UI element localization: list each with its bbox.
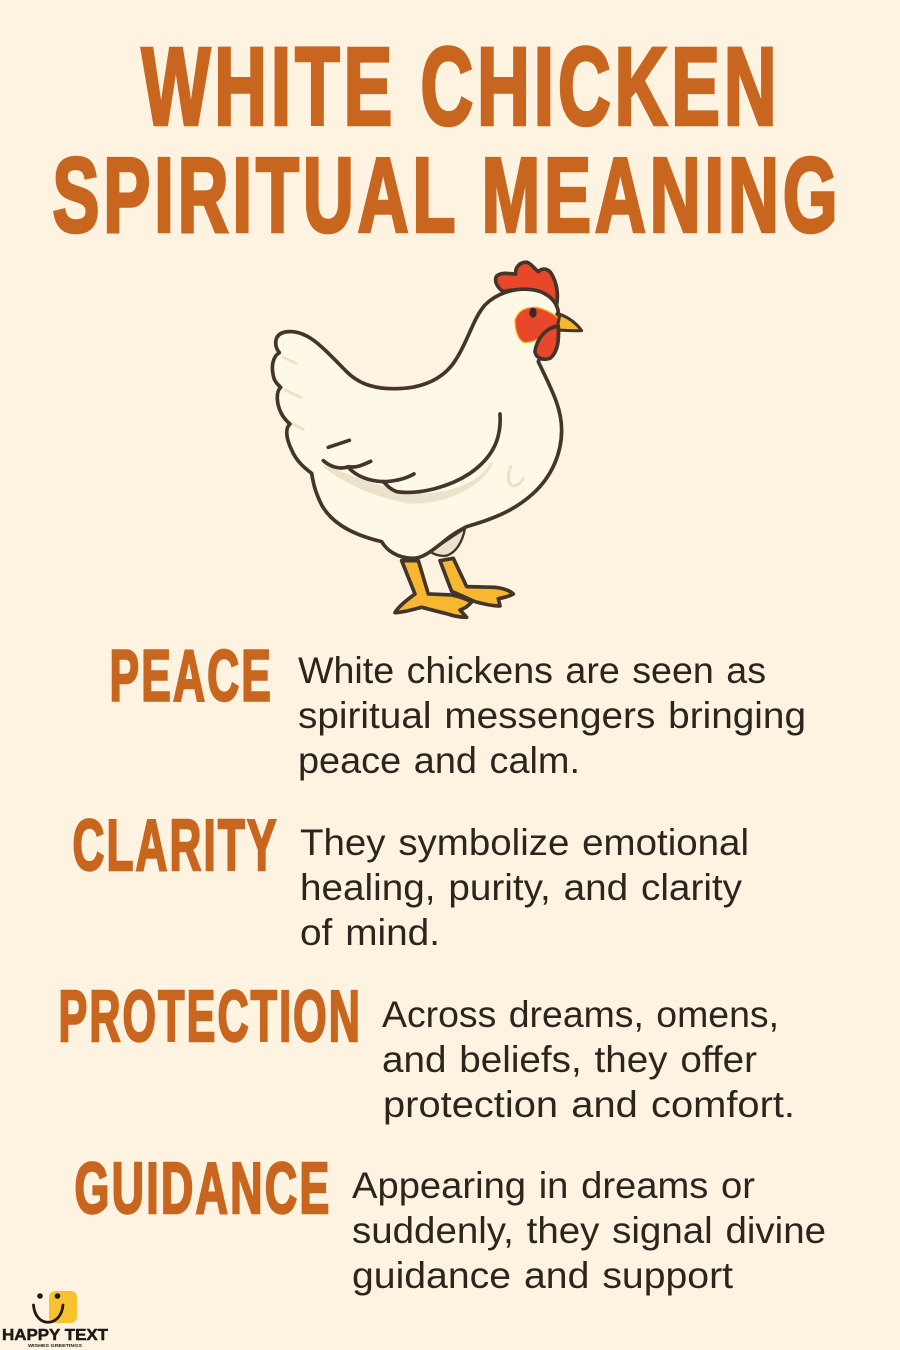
text: clarity description: They symbolize emotional: [300, 822, 749, 863]
text: protection description: Across dreams, omens,: [382, 994, 779, 1035]
text: protection description: protection and comfort.: [383, 1084, 795, 1125]
text: peace description: spiritual messengers bringing: [298, 695, 806, 736]
text: clarity description: of mind.: [300, 912, 440, 953]
heading: clarity: CLARITY: [72, 806, 278, 886]
logo: happy text: [2, 1291, 108, 1348]
section: peace: [110, 636, 806, 781]
section: clarity: [72, 806, 749, 953]
text: clarity description: healing, purity, and clarity: [300, 867, 743, 908]
text: guidance description: Appearing in dreams or: [352, 1165, 755, 1206]
chicken wing shadow: [325, 463, 492, 502]
logo tagline: WISHES GREETINGS: [28, 1343, 82, 1348]
icon: white chicken: [272, 262, 582, 617]
chicken body: [272, 289, 562, 558]
text: guidance description: suddenly, they signal divine: [352, 1210, 826, 1251]
text: guidance description: [352, 1165, 826, 1296]
chicken tail marks: [283, 357, 523, 486]
logo wordmark: HAPPY TEXT: [2, 1327, 108, 1344]
text: protection description: [382, 994, 795, 1125]
chicken far leg: [440, 558, 513, 606]
logo icon: smiley: [34, 1291, 77, 1323]
text: peace description: peace and calm.: [298, 740, 580, 781]
chicken thigh: [430, 528, 465, 556]
chicken eye: [529, 308, 537, 318]
text: guidance description: guidance and support: [352, 1255, 734, 1296]
chicken beak: [557, 314, 582, 331]
section: protection: [58, 977, 795, 1125]
section: guidance: [74, 1149, 826, 1296]
text: protection description: and beliefs, they offer: [382, 1039, 757, 1080]
heading: peace: PEACE: [110, 636, 273, 716]
chicken wattle: [535, 326, 559, 359]
heading: protection: PROTECTION: [58, 977, 362, 1057]
chicken near leg: [395, 561, 472, 617]
chicken wing lines: [323, 414, 500, 492]
title: [52, 26, 841, 254]
text: clarity description: [300, 822, 749, 953]
text: peace description: [298, 650, 806, 781]
heading: guidance: GUIDANCE: [74, 1149, 332, 1229]
chicken face patch: [515, 307, 558, 343]
chicken comb: [496, 262, 557, 305]
text: peace description: White chickens are seen as: [298, 650, 766, 691]
